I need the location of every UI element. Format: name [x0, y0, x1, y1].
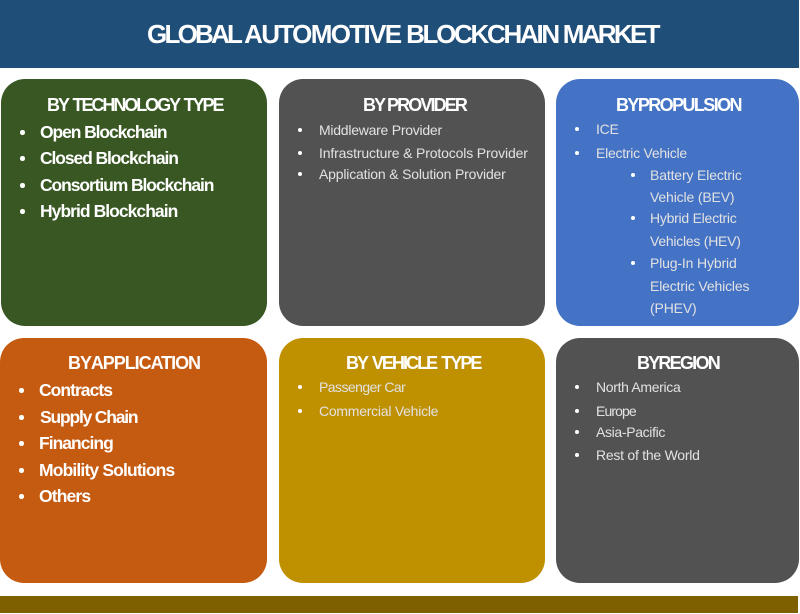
- item: application and solution provider: Application & Solution Provider: [319, 166, 506, 182]
- item: infrastructure and protocols provider: Infrastructure & Protocols Provider: [319, 145, 528, 161]
- item: closed blockchain: Closed Blockchain: [40, 148, 178, 168]
- panel: by provider: [279, 79, 545, 326]
- item: hybrid electric vehicles: [650, 207, 741, 252]
- item: financing: Financing: [39, 433, 113, 453]
- item: plug-in hybrid electric vehicles: Electric Vehicles: [650, 278, 749, 294]
- item: commercial vehicle: Commercial Vehicle: [319, 403, 438, 419]
- item: plug-in hybrid electric vehicles: [650, 252, 749, 320]
- item: passenger car: Passenger Car: [319, 379, 405, 395]
- heading: by vehicle type: BY VEHICLE TYPE: [346, 353, 480, 373]
- item: europe: Europe: [596, 403, 636, 419]
- item: battery electric vehicle: Battery Electric: [650, 166, 742, 182]
- panel: by region: [556, 338, 799, 583]
- title banner: [0, 0, 799, 68]
- panel: by technology type: [1, 79, 267, 326]
- item: middleware provider: Middleware Provider: [319, 122, 442, 138]
- item: electric vehicle: Electric Vehicle: [596, 145, 687, 161]
- item: mobility solutions: Mobility Solutions: [39, 460, 174, 480]
- item: others: Others: [39, 486, 90, 506]
- item: hybrid blockchain: Hybrid Blockchain: [40, 201, 177, 221]
- item: battery electric vehicle: [650, 164, 742, 208]
- item: plug-in hybrid electric vehicles: (PHEV): [650, 300, 697, 316]
- item: hybrid electric vehicles: Hybrid Electric: [650, 210, 736, 226]
- panel: by vehicle type: [279, 338, 545, 583]
- heading: by technology type: BY TECHNOLOGY TYPE: [47, 95, 222, 115]
- item: ice: ICE: [596, 121, 619, 137]
- heading: by provider: BY PROVIDER: [363, 95, 466, 115]
- item: plug-in hybrid electric vehicles: Plug-In Hybrid: [650, 255, 737, 271]
- heading: by region: BY REGION: [637, 353, 719, 373]
- item: hybrid electric vehicles: Vehicles (HEV): [650, 232, 741, 248]
- item: contracts: Contracts: [39, 380, 112, 400]
- footer bar: [0, 596, 798, 613]
- item: rest of the world: Rest of the World: [596, 447, 700, 463]
- item: consortium blockchain: Consortium Blockchain: [40, 175, 213, 195]
- item: supply chain: Supply Chain: [40, 407, 137, 427]
- panel: by application: [0, 338, 267, 583]
- item: open blockchain: Open Blockchain: [40, 122, 166, 142]
- heading: by application: BY APPLICATION: [68, 353, 200, 373]
- panel: by propulsion: [556, 79, 799, 326]
- title: GLOBAL AUTOMOTIVE BLOCKCHAIN MARKET: [147, 19, 658, 49]
- item: north america: North America: [596, 379, 680, 395]
- item: asia-pacific: Asia-Pacific: [596, 424, 665, 440]
- heading: by propulsion: BY PROPULSION: [616, 95, 741, 115]
- item: battery electric vehicle: Vehicle (BEV): [650, 189, 734, 205]
